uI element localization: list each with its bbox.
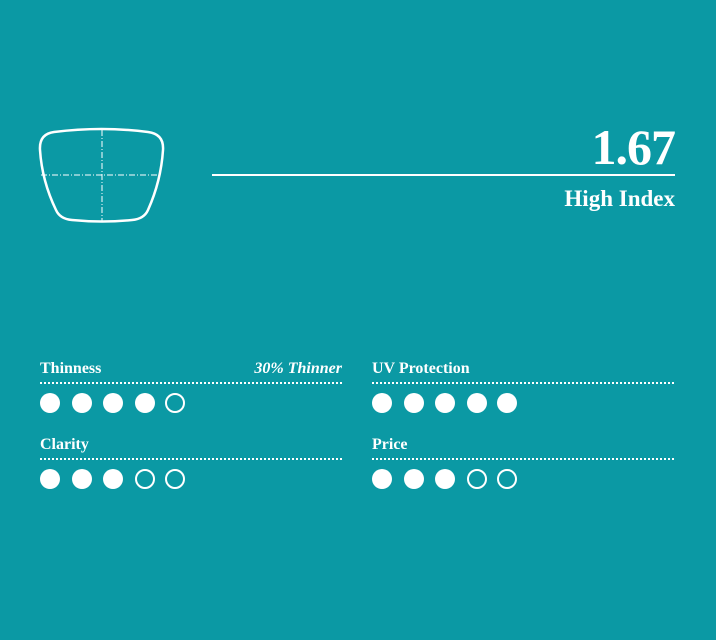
title: 1.67: 1.67	[592, 119, 675, 175]
panel: price	[372, 436, 674, 489]
panel: clarity	[40, 436, 342, 489]
divider line	[212, 174, 675, 176]
panel: thinness: 30% Thinner	[254, 360, 342, 377]
panel: UV protection: UV Protection	[372, 360, 470, 377]
icon: lens	[38, 128, 164, 223]
subtitle: High Index	[564, 186, 675, 211]
panel: UV protection	[372, 360, 674, 413]
panel: thinness: Thinness	[40, 360, 101, 377]
panel: clarity: Clarity	[40, 436, 89, 453]
panel: price: Price	[372, 436, 408, 453]
panel: thinness	[40, 360, 342, 413]
